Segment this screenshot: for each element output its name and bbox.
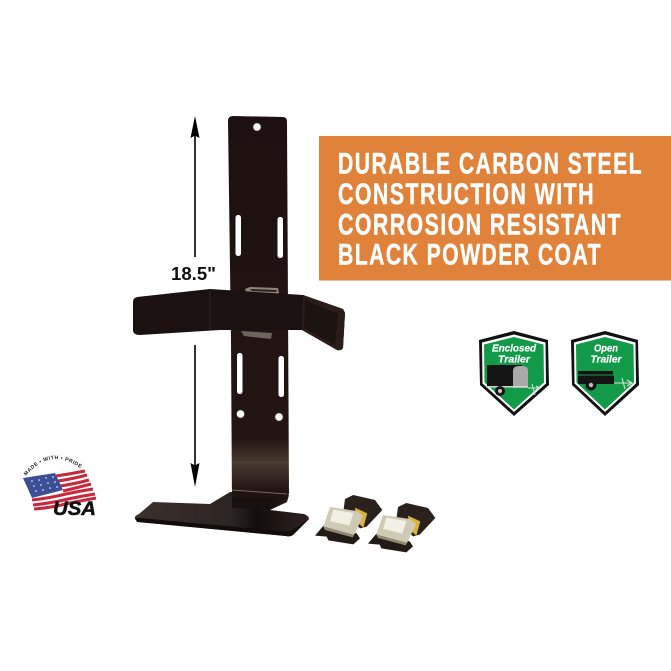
trailer drawing — [486, 365, 540, 396]
dimension label: 18.5" — [171, 263, 216, 284]
badge label: Trailer — [498, 354, 531, 366]
vertical plate — [228, 116, 289, 510]
cross arm — [133, 289, 345, 350]
product: cam buckle straps — [315, 495, 435, 552]
base plate — [135, 492, 309, 536]
product: bracket — [133, 116, 345, 536]
panel: orange feature callout — [319, 136, 671, 280]
badge label: Trailer — [590, 354, 622, 366]
icon: enclosed trailer shield — [479, 331, 549, 416]
badge label — [492, 342, 537, 366]
arc slogan: MADE • WITH • PRIDE — [24, 456, 82, 476]
lower clip — [241, 331, 272, 339]
badge label: Open — [594, 342, 618, 354]
callout text — [338, 148, 643, 272]
lower slots — [237, 353, 284, 397]
badge label — [590, 342, 622, 366]
upper clip — [245, 287, 279, 294]
mounting hole — [253, 123, 261, 131]
lower holes — [236, 410, 283, 421]
flag canton — [23, 473, 63, 498]
trailer drawing — [578, 371, 632, 390]
USA wordmark: USA — [53, 499, 96, 520]
icon: made with pride USA logo — [23, 456, 96, 520]
icon: open trailer shield — [571, 331, 639, 416]
flag stripes — [32, 469, 97, 513]
height dimension arrow — [190, 116, 200, 487]
buckle left — [315, 495, 382, 544]
upper slots — [236, 215, 283, 258]
badge label: Enclosed — [492, 342, 537, 354]
buckle right — [368, 503, 435, 552]
